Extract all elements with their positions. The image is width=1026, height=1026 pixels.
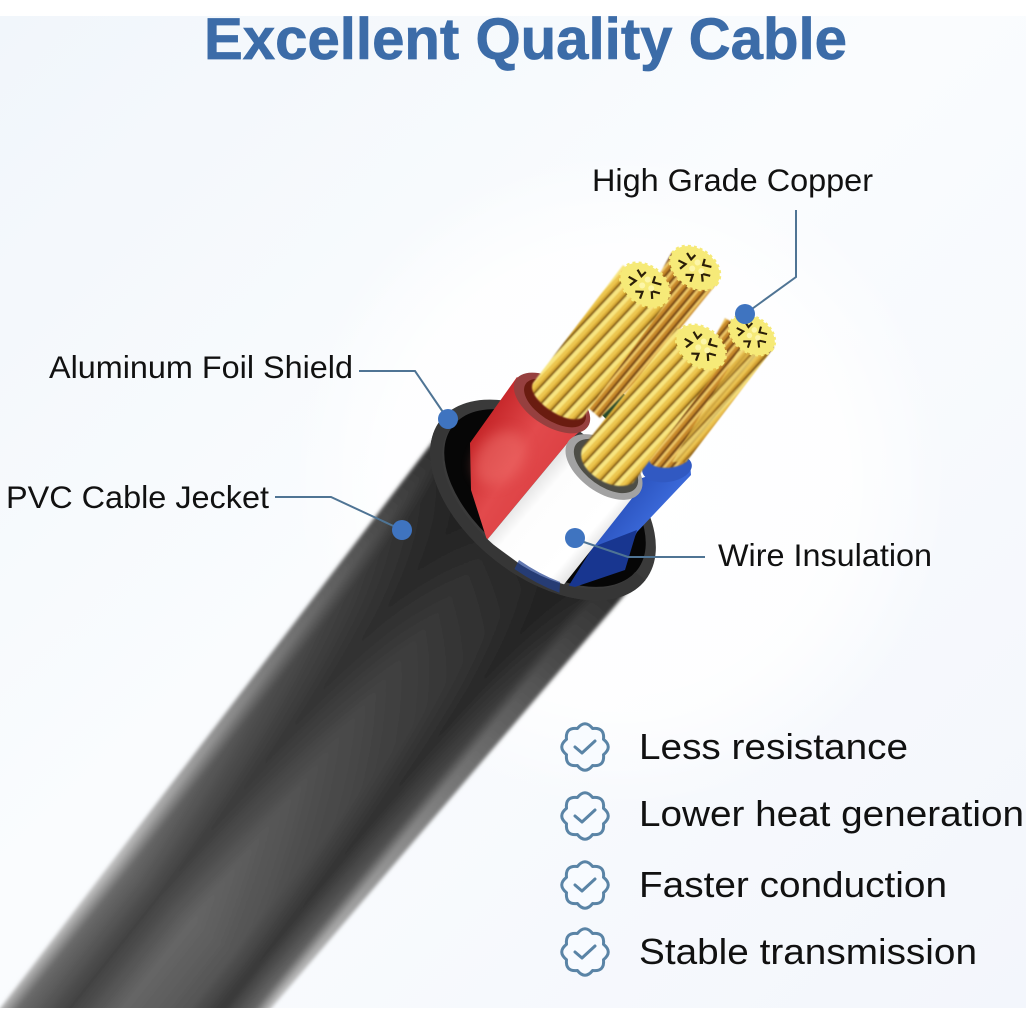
red wire bbox=[466, 372, 590, 540]
white wire copper conductor bbox=[581, 316, 734, 486]
label: PVC Cable Jecket: PVC Cable Jecket bbox=[6, 479, 269, 515]
benefits list bbox=[562, 724, 1024, 975]
label: Wire Insulation bbox=[565, 528, 932, 573]
red wire copper conductor bbox=[532, 254, 678, 419]
white wire bbox=[488, 434, 642, 584]
benefit: Lower heat generation: Lower heat generation bbox=[639, 793, 1024, 834]
bottom white strip bbox=[0, 1008, 1026, 1026]
benefit: Less resistance: Less resistance bbox=[639, 726, 908, 767]
blue wire copper conductor bbox=[649, 307, 782, 468]
title: Excellent Quality Cable bbox=[204, 7, 847, 72]
cable jacket bbox=[0, 400, 656, 1008]
benefit: Faster conduction: Faster conduction bbox=[639, 864, 947, 905]
back green wire and copper bbox=[588, 244, 722, 419]
jacket front rim bbox=[430, 422, 646, 597]
benefit: Stable transmission bbox=[562, 929, 977, 975]
benefit: Less resistance bbox=[562, 724, 908, 770]
label: Wire Insulation: Wire Insulation bbox=[718, 537, 932, 573]
blue wire bbox=[568, 458, 692, 587]
label: High Grade Copper bbox=[592, 162, 873, 324]
cable illustration bbox=[0, 237, 782, 1026]
label: Aluminum Foil Shield bbox=[49, 349, 458, 429]
benefit: Stable transmission: Stable transmission bbox=[639, 931, 977, 972]
label: PVC Cable Jecket bbox=[6, 479, 412, 540]
benefit: Faster conduction bbox=[562, 862, 947, 908]
label: High Grade Copper: High Grade Copper bbox=[592, 162, 873, 198]
benefit: Lower heat generation bbox=[562, 793, 1024, 839]
label: Aluminum Foil Shield: Aluminum Foil Shield bbox=[49, 349, 353, 385]
